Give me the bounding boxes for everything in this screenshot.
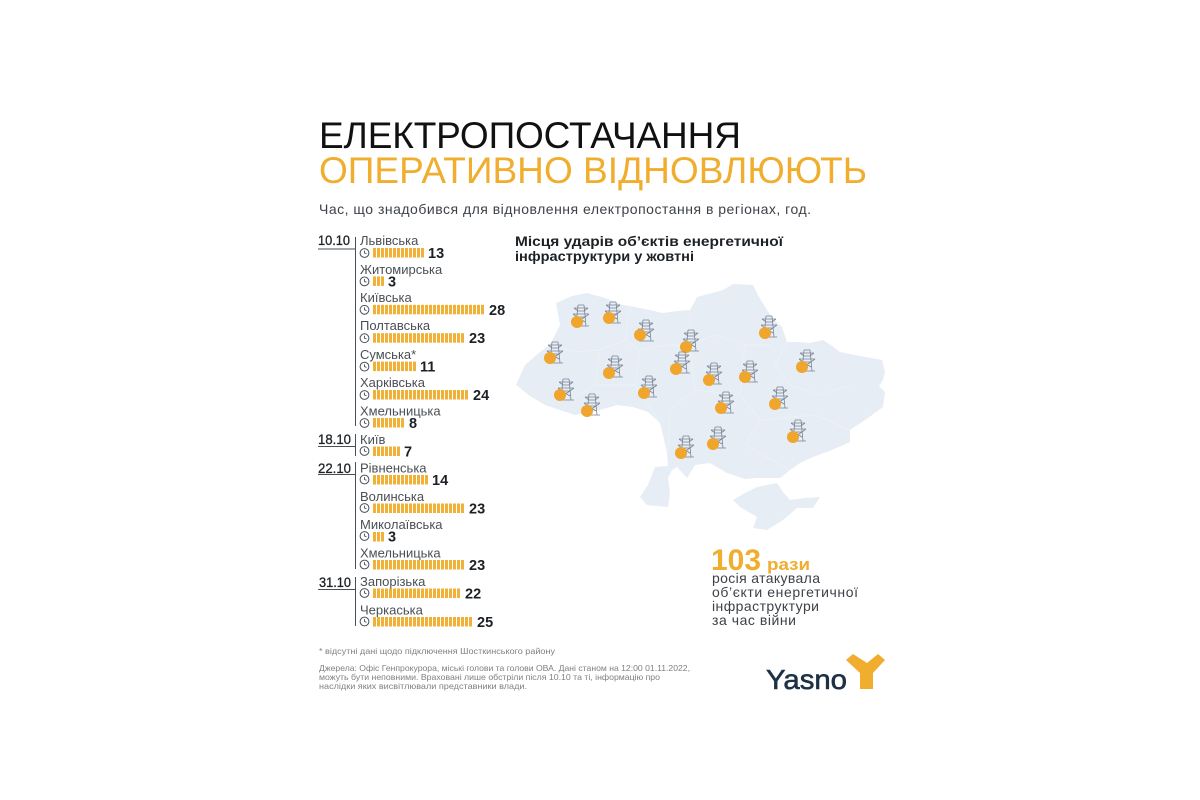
row: Київська 28: 28 [489,303,505,319]
row: Київ 7: Київ [360,432,385,447]
row: Полтавська 23: 23 [469,331,485,347]
row: Хмельницька 8: Хмельницька [360,404,441,418]
marker [769,387,788,410]
row: Рівненська 14: Рівненська [360,460,427,476]
sources: наслідки яких висвітлювали представники влади. [319,681,527,691]
logo: Yasno [766,654,885,695]
row: Львівська 13: 13 [428,246,444,262]
date group: 10.10: 10.10 [318,232,350,248]
row: Львівська 13 [360,233,444,262]
row: Київська 28 [360,290,505,319]
row: Житомирська 3 [360,262,443,290]
marker [581,394,600,417]
date group: 18.10: 18.10 [318,431,351,447]
marker [796,350,815,373]
row: Харківська 24 [360,375,489,404]
row: Київ 7: 7 [404,444,412,460]
callout: 103 attacks: об’єкти енергетичної [712,584,858,600]
row: Хмельницька 23: 23 [469,558,485,574]
row: Черкаська 25: 25 [477,615,493,631]
logo: Yasno: Yasno [766,664,847,695]
row: Харківська 24: 24 [473,388,489,404]
row: Полтавська 23: Полтавська [360,318,431,333]
callout: 103 attacks: за час війни [712,612,796,628]
row: Волинська 23: Волинська [360,489,425,504]
map: strike markers [544,302,815,459]
date group: 22.10 [318,460,356,569]
date group: 31.10: 31.10 [319,574,351,590]
date group: 22.10: 22.10 [318,460,351,476]
subtitle: Час, що знадобився для відновлення електропостання в регіонах, год. [319,201,811,217]
marker [603,356,623,379]
marker [707,427,726,450]
row: Сумська 11: Сумська* [360,347,416,362]
callout: 103 attacks [711,544,858,628]
row: Хмельницька 23 [360,546,485,574]
map heading [515,233,784,264]
row: Хмельницька 23: Хмельницька [360,546,441,560]
row: Запорізька 22 [360,574,481,602]
title: ОПЕРАТИВНО ВІДНОВЛЮЮТЬ [319,150,867,191]
callout: 103 attacks: росія атакувала [712,570,820,586]
row: Сумська 11: 11 [420,360,435,376]
marker [670,352,690,375]
marker [544,342,563,364]
row: Харківська 24: Харківська [360,375,426,390]
row: Житомирська 3: 3 [388,274,396,290]
sources: Джерела: Офіс Генпрокурора, міські голови та голови ОВА. Дані станом на 12:00 01.11.2022, [319,663,690,673]
row: Миколаївська 3 [360,517,443,546]
row: Волинська 23 [360,489,485,518]
row: Хмельницька 8: 8 [409,416,417,432]
row: Запорізька 22: Запорізька [360,574,426,589]
date group: 10.10 [318,232,356,426]
callout: 103 attacks: 103 [711,544,761,577]
marker [680,330,699,353]
row: Полтавська 23 [360,318,485,347]
footnote: * відсутні дані щодо підключення Шосткинського району [319,646,556,656]
marker [603,302,621,324]
map of Ukraine [516,284,885,530]
row: Київ 7 [360,432,412,460]
map heading: інфраструктури у жовтні [515,248,694,264]
marker [787,420,806,443]
row: Сумська 11 [360,347,435,376]
marker [634,320,654,341]
marker [703,363,722,386]
row: Рівненська 14 [360,460,448,489]
title: ЕЛЕКТРОПОСТАЧАННЯ [319,115,741,156]
map heading: Місця ударів об’єктів енергетичної [515,233,784,249]
row: Миколаївська 3: 3 [388,530,396,546]
marker [554,379,574,401]
callout: 103 attacks: інфраструктури [712,598,819,614]
title [319,115,867,191]
restoration time chart [318,232,505,631]
row: Черкаська 25 [360,602,493,631]
map: Crimea [733,483,820,530]
row: Житомирська 3: Житомирська [360,262,443,277]
sources [319,663,690,691]
row: Миколаївська 3: Миколаївська [360,517,443,532]
marker [571,305,589,328]
row: Хмельницька 8 [360,404,441,432]
marker [739,361,758,383]
row: Волинська 23: 23 [469,502,485,518]
row: Львівська 13: Львівська [360,233,419,248]
marker [759,316,777,339]
marker [675,436,694,459]
callout: 103 attacks: рази [767,555,810,574]
date group: 31.10 [318,574,356,626]
row: Черкаська 25: Черкаська [360,602,424,618]
marker [638,376,657,399]
marker [715,392,734,414]
row: Запорізька 22: 22 [465,586,481,602]
row: Рівненська 14: 14 [432,473,448,489]
sources: можуть бути неповними. Враховані лише обстріли після 10.10 та ті, інформацію про [319,672,660,682]
date group: 18.10 [318,431,356,456]
row: Київська 28: Київська [360,290,412,305]
